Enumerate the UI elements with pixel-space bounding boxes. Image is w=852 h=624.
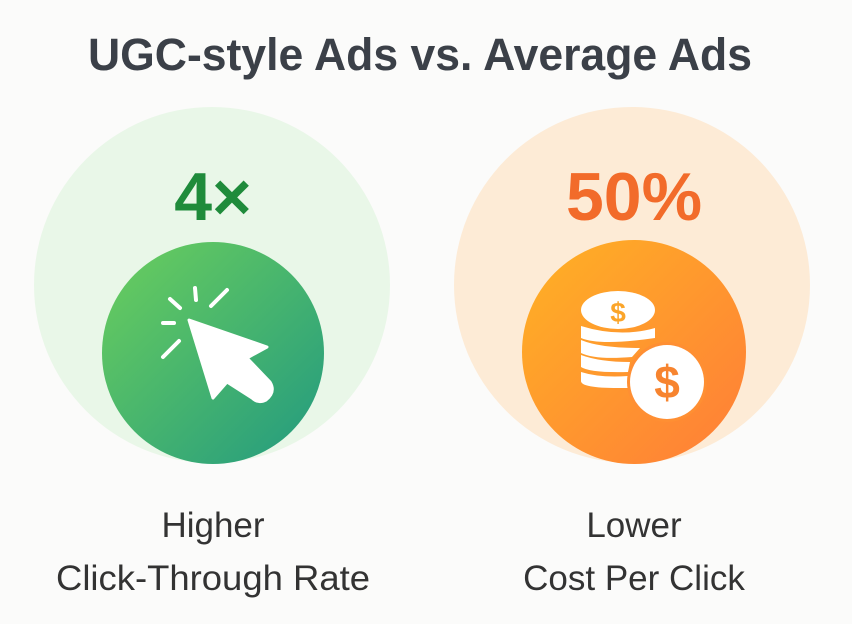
stat: 4x: 4× bbox=[174, 159, 252, 235]
panel: CPC bbox=[454, 107, 810, 545]
title: UGC-style Ads vs. Average Ads bbox=[88, 29, 752, 80]
label: CTR: Higher bbox=[161, 506, 265, 545]
icon: coins bbox=[522, 240, 746, 464]
label: CTR line 2: Click-Through Rate bbox=[56, 559, 370, 598]
outer circle green bbox=[34, 107, 390, 463]
panel: CTR bbox=[34, 107, 390, 545]
stat: 50%: 50% bbox=[566, 159, 702, 235]
label: CPC: Lower bbox=[586, 506, 682, 545]
icon: coins: $ bbox=[610, 297, 626, 328]
label: CPC line 2: Cost Per Click bbox=[523, 559, 745, 598]
icon: cursor click bbox=[102, 242, 324, 464]
icon: coins: $ bbox=[654, 356, 680, 408]
outer circle orange bbox=[454, 107, 810, 463]
